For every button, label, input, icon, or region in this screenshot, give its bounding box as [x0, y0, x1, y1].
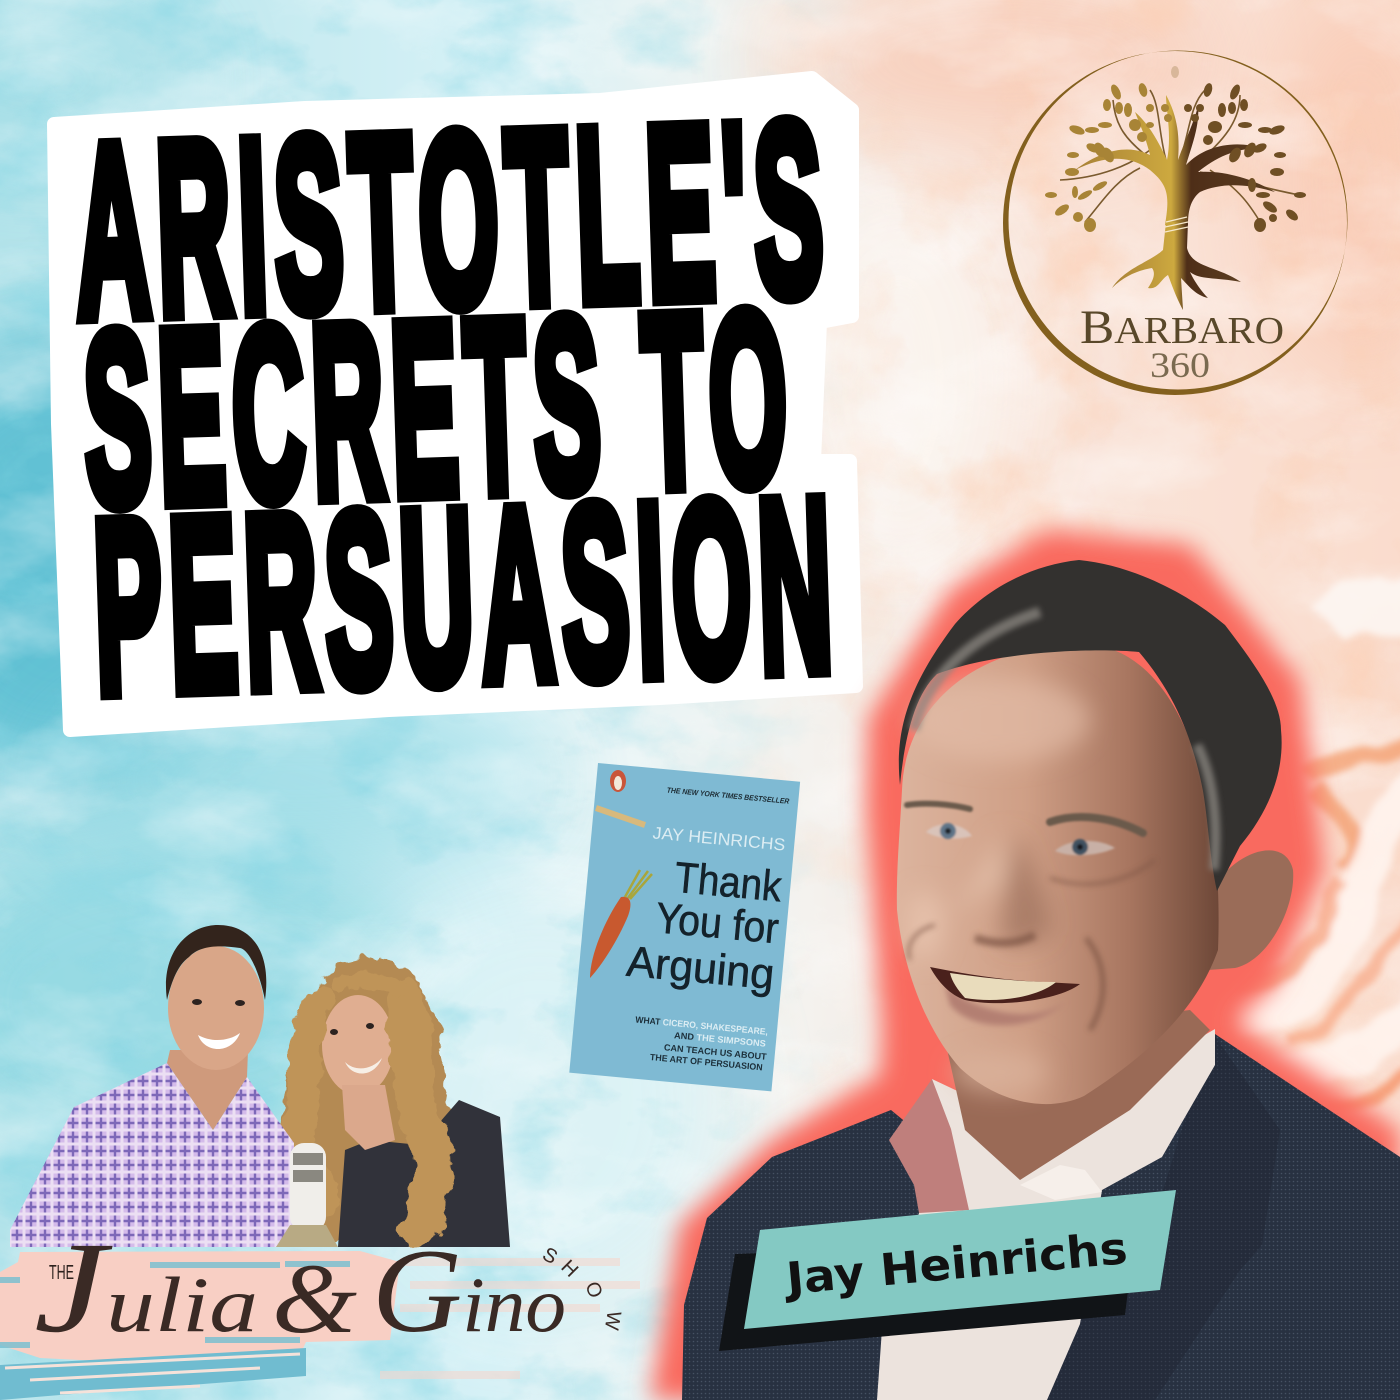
host: Julia neck	[342, 1085, 395, 1150]
jacket lapel shading	[1047, 1032, 1280, 1400]
portrait: Jay Heinrichs	[650, 530, 1400, 1400]
face	[897, 645, 1219, 1104]
label band	[744, 1190, 1176, 1329]
show logo: The Julia & Gino Show	[0, 1216, 640, 1400]
host: Gino neck	[167, 1050, 248, 1130]
shirt and collar	[877, 1029, 1215, 1400]
face shading	[907, 678, 1090, 1092]
show word: The: THE	[49, 1262, 74, 1284]
host: Julia hair back	[282, 958, 457, 1245]
logo wordmark: BARBARO	[1080, 301, 1284, 354]
show word: Show	[538, 1243, 625, 1332]
host: Julia hair front	[297, 979, 432, 1232]
title	[54, 70, 856, 744]
show word: Show: S	[538, 1243, 561, 1269]
host eyes	[192, 999, 374, 1035]
suit jacket	[682, 1032, 1400, 1400]
host: Gino smile	[198, 1033, 240, 1049]
hair highlights	[914, 612, 1216, 870]
icon: stick	[596, 808, 645, 825]
show word: Show: H	[556, 1256, 582, 1282]
microphone	[276, 1143, 338, 1247]
host: Julia smile	[345, 1058, 382, 1074]
eyes	[926, 823, 1115, 855]
book subtitle: AND THE SIMPSONS	[674, 1030, 766, 1049]
show name	[34, 1216, 566, 1360]
ear	[1208, 850, 1293, 970]
right collar flap	[1020, 1165, 1102, 1200]
show word: Show: W	[600, 1309, 625, 1332]
title text	[71, 70, 843, 744]
collar lining	[889, 1079, 969, 1213]
neck	[945, 1010, 1210, 1180]
brush stroke banner	[0, 1251, 640, 1400]
title white backing	[54, 78, 856, 730]
book subtitle: CAN TEACH US ABOUT	[664, 1042, 768, 1062]
smile	[930, 967, 1080, 1025]
label shadow	[719, 1240, 1134, 1351]
name label	[719, 1190, 1176, 1351]
book title: You for	[654, 894, 781, 953]
logo number: 360	[1150, 345, 1210, 385]
book panel	[569, 763, 800, 1091]
book author: JAY HEINRICHS	[652, 823, 786, 855]
hair	[899, 560, 1282, 891]
label text: Jay Heinrichs	[781, 1223, 1130, 1305]
book title: Thank	[673, 854, 784, 911]
show name: Julia	[34, 1216, 258, 1360]
host: Julia face	[322, 995, 394, 1095]
icon: penguin logo	[610, 770, 626, 792]
show name: &	[272, 1243, 357, 1354]
hosts photo	[10, 925, 510, 1247]
host: Gino shirt	[10, 1063, 294, 1247]
book bestseller line: THE NEW YORK TIMES BESTSELLER	[666, 785, 790, 806]
nose and cheek lines	[909, 860, 1155, 1030]
eyebrows	[907, 804, 1143, 833]
book subtitle	[632, 1015, 770, 1073]
red glow outline	[650, 530, 1400, 1400]
logo tree	[1045, 66, 1306, 310]
logo: Barbaro 360	[1003, 51, 1348, 395]
orange swirl streaks	[1230, 600, 1400, 1120]
host: Julia sweater	[338, 1100, 510, 1247]
book subtitle: THE ART OF PERSUASION	[650, 1052, 763, 1072]
show name: Gino	[372, 1224, 566, 1357]
book title	[625, 850, 784, 999]
logo ring	[1003, 51, 1348, 395]
host: Gino face	[168, 946, 264, 1070]
show word: Show: O	[580, 1279, 607, 1301]
book subtitle: WHAT CICERO, SHAKESPEARE,	[635, 1015, 768, 1037]
book title: Arguing	[625, 938, 776, 999]
icon: carrot	[590, 870, 652, 978]
host: Gino hair	[166, 925, 266, 1000]
book cover: Thank You for Arguing	[569, 763, 800, 1091]
